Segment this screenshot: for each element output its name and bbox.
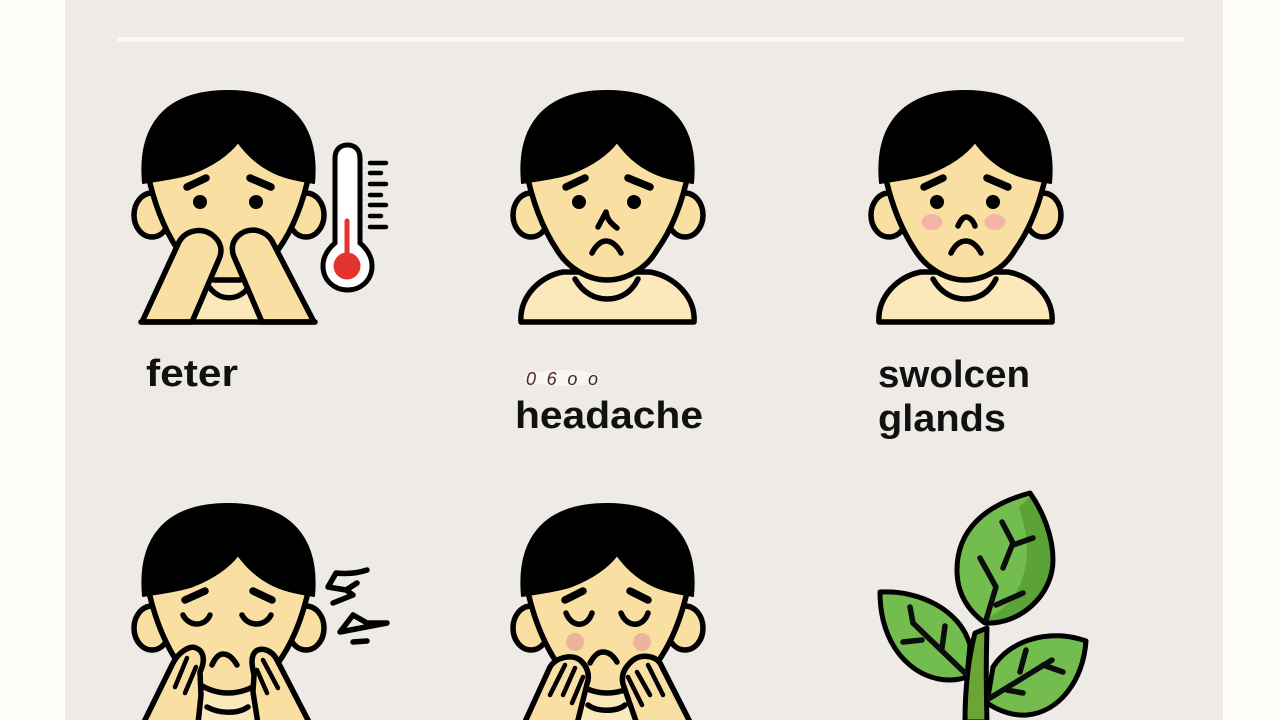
top divider rule [117, 37, 1184, 42]
label: headache: headache [515, 395, 703, 437]
right hand [622, 656, 691, 720]
label: swollen glands: swolcen [878, 354, 1030, 396]
right hand [252, 649, 310, 720]
left hand [524, 657, 588, 720]
left leaf [880, 592, 970, 680]
icon: headache, sad face with nose [513, 91, 703, 322]
sneeze marks [328, 570, 387, 642]
label: fever: feter [146, 353, 238, 395]
label: swollen glands: glands [878, 398, 1006, 440]
label: swollen glands [878, 354, 1030, 440]
left arm [142, 231, 221, 322]
right leaf [987, 636, 1086, 715]
right arm [232, 230, 314, 322]
eyes and brows [193, 195, 207, 209]
icon: tired face with hands on cheeks and sneeze marks [134, 504, 387, 720]
stem [965, 628, 987, 720]
icon: tired face with blush and hands on cheeks [513, 504, 703, 720]
icon: swollen glands, sad face with rosy cheeks [871, 91, 1061, 322]
icon: fever, face with hands and thermometer [134, 91, 386, 322]
top leaf [957, 493, 1053, 623]
thermometer [323, 145, 386, 290]
left hand [143, 647, 203, 720]
icon: green plant with three leaves [880, 493, 1086, 720]
scribbled caption above headache: 0 6 o o [526, 369, 598, 389]
